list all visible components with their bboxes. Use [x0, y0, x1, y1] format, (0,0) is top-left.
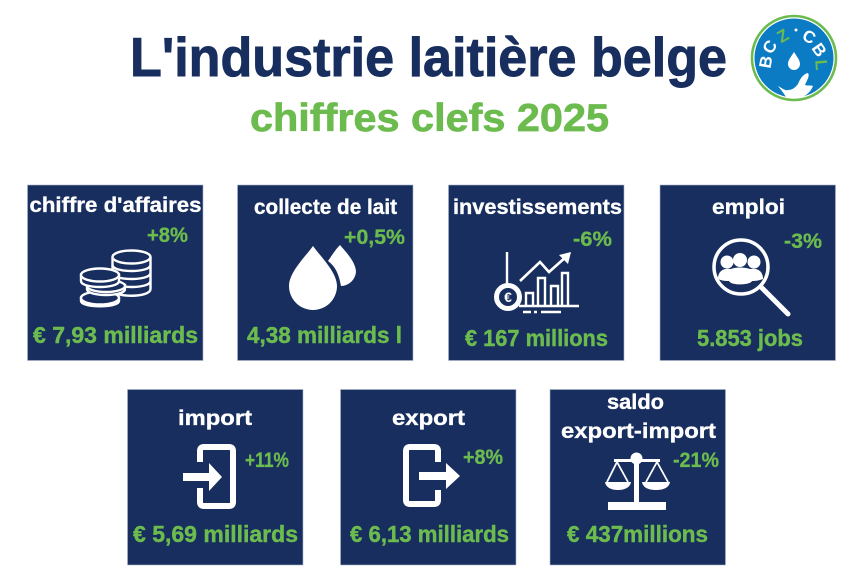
logo: BCZ CBL: B	[756, 54, 776, 70]
panel: saldo export-import: saldo	[607, 390, 664, 414]
panel: chiffre d'affaires: € 7,93 milliards	[33, 322, 198, 348]
panel: emploi: 5.853 jobs	[697, 325, 803, 351]
panel: investissements	[448, 185, 624, 360]
panel: collecte de lait: +0,5%	[344, 226, 405, 249]
panel: import	[128, 390, 303, 565]
logo: BCZ CBL: C	[799, 26, 819, 48]
panel: import: +11%	[245, 449, 289, 472]
panel: export: € 6,13 milliards	[350, 521, 509, 547]
panel: saldo export-import: € 437millions	[567, 521, 708, 547]
panel: saldo export-import: -21%	[673, 449, 719, 472]
panel: emploi	[660, 185, 836, 360]
panel: emploi: emploi	[712, 195, 785, 219]
panel: import: import	[178, 406, 252, 430]
panel: export: +8%	[463, 446, 503, 469]
icon: growth chart with euro: €	[504, 289, 512, 305]
subtitle: chiffres clefs 2025	[250, 97, 609, 140]
panel: export	[340, 390, 516, 565]
panel: chiffre d'affaires: +8%	[147, 224, 188, 247]
panel: chiffre d'affaires	[28, 185, 203, 360]
logo: BCZ CBL: C	[759, 37, 781, 57]
icon: exiting door arrow	[406, 447, 460, 504]
panel: import: € 5,69 milliards	[133, 521, 298, 547]
title: L'industrie laitière belge	[130, 26, 727, 88]
panel: export: export	[392, 406, 465, 430]
panel: collecte de lait: collecte de lait	[254, 195, 397, 219]
icon: magnifier with people	[714, 240, 788, 314]
panel: emploi: -3%	[784, 230, 822, 253]
icon: balance scale	[605, 452, 670, 510]
panel: collecte de lait: 4,38 milliards l	[247, 322, 402, 348]
icon: entering door arrow	[183, 447, 233, 506]
logo: BCZ CBL: L	[811, 59, 831, 71]
logo: BCZ CBL: B	[808, 40, 830, 60]
icon: coins	[81, 250, 150, 306]
panel: collecte de lait	[238, 185, 413, 360]
icon: growth chart with euro	[496, 252, 579, 312]
panel: investissements: € 167 millions	[465, 325, 608, 351]
icon: milk drops	[289, 245, 356, 310]
panel: saldo export-import	[550, 390, 726, 565]
logo: BCZ CBL: Z	[774, 25, 792, 47]
panel: saldo export-import: export-import	[561, 419, 716, 443]
logo: BCZ CBL	[752, 16, 836, 100]
panel: investissements: investissements	[453, 195, 622, 219]
panel: chiffre d'affaires: chiffre d'affaires	[30, 193, 202, 217]
panel: investissements: -6%	[573, 228, 612, 251]
